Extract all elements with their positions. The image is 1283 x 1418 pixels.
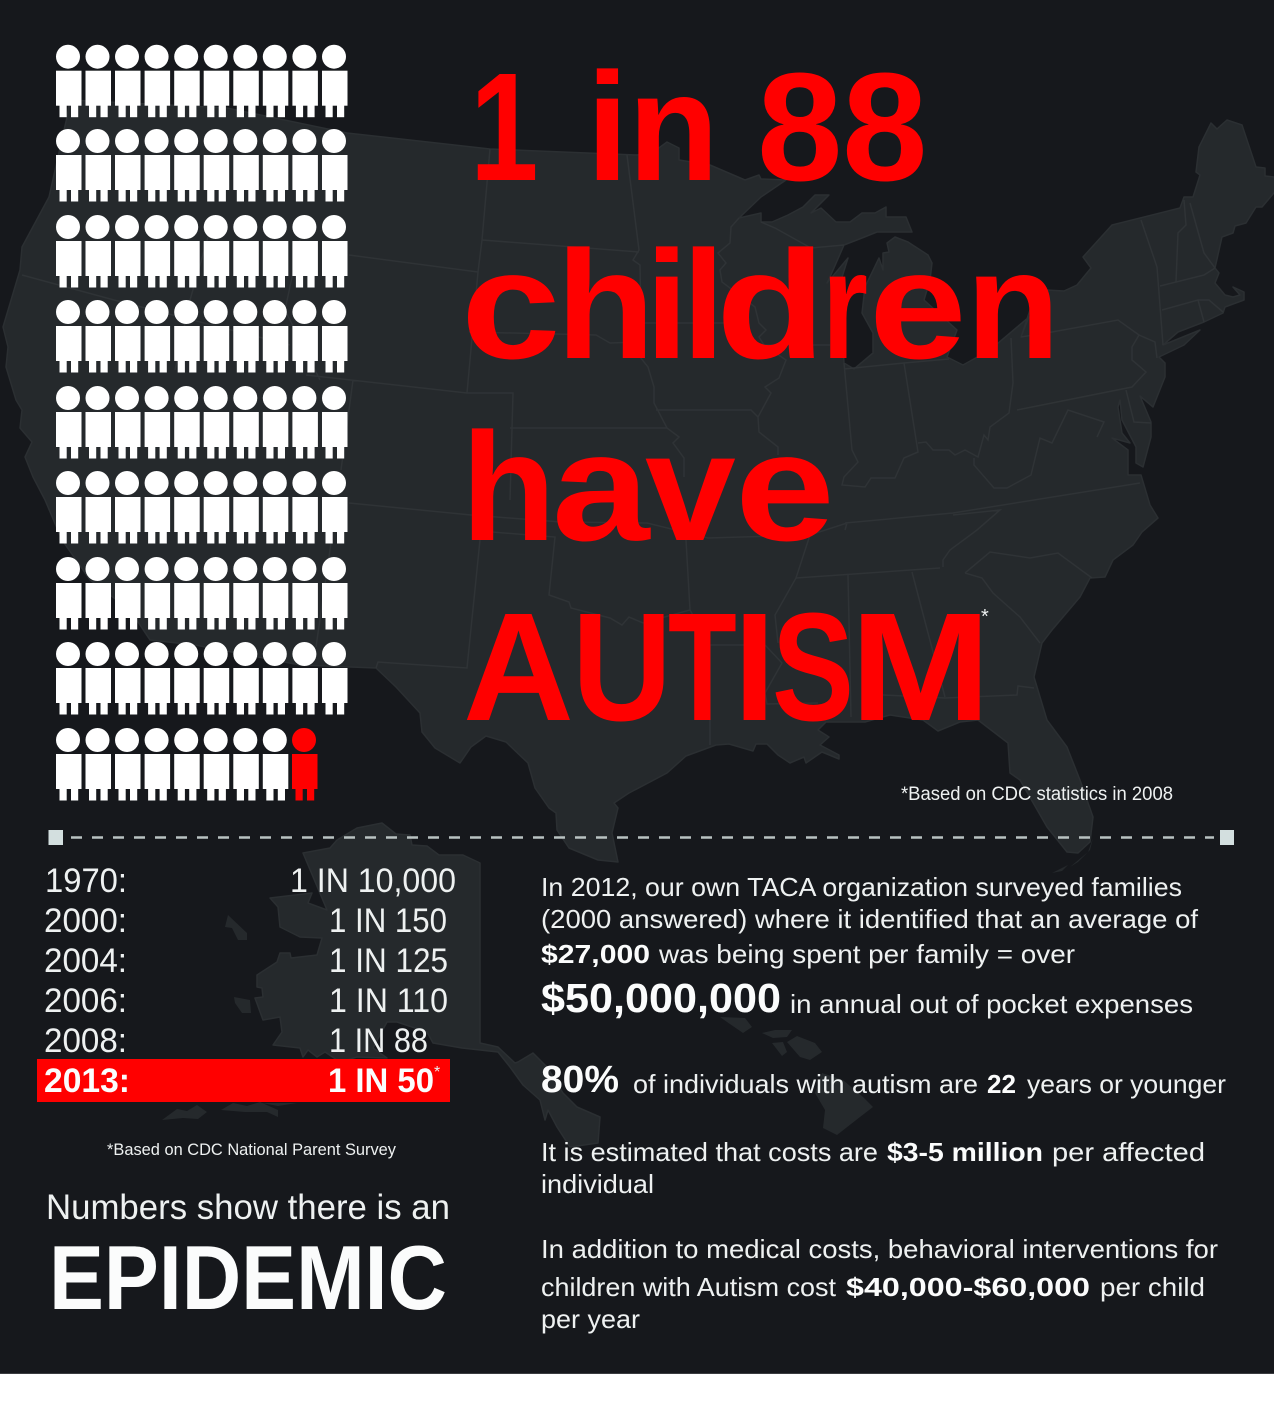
title: 1 in 88 children have AUTISM: I xyxy=(734,581,776,753)
row 4 of figures xyxy=(56,300,348,372)
title: 1 in 88 children have AUTISM: 8 xyxy=(842,41,928,213)
row 2 of figures xyxy=(56,129,348,202)
text block: TACA survey costs xyxy=(541,872,1199,1021)
text block: TACA survey costs: (2000 answered) where it identified that an average of xyxy=(541,904,1199,934)
title: 1 in 88 children have AUTISM: r xyxy=(822,219,868,391)
title: 1 in 88 children have AUTISM: l xyxy=(682,219,725,391)
title: 1 in 88 children have AUTISM: n xyxy=(966,219,1060,391)
text block: behavioral intervention costs: In addition to medical costs, behavioral interventions for xyxy=(541,1234,1218,1264)
title: 1 in 88 children have AUTISM: e xyxy=(735,401,835,573)
map: Hawaii xyxy=(720,1017,873,1135)
row: 2006: 2006: xyxy=(44,982,127,1020)
text block: TACA survey costs: In 2012, our own TACA organization surveyed families xyxy=(541,872,1182,902)
row: 2008: 2008: xyxy=(44,1022,127,1060)
row 7 of figures xyxy=(56,557,348,630)
title: 1 in 88 children have AUTISM: M xyxy=(850,581,991,753)
row: 1970 xyxy=(45,862,456,900)
row 9 of figures, eight white and one red xyxy=(56,728,318,800)
text block: behavioral intervention costs xyxy=(541,1234,1218,1334)
highlighted row: 2013 xyxy=(37,1059,450,1102)
row: 2008: 1 IN 88 xyxy=(329,1022,428,1060)
text block: TACA survey costs: in annual out of pocket expenses xyxy=(790,989,1193,1019)
text block: 80 percent statistic: 80% xyxy=(541,1059,619,1101)
footnote: National Parent Survey: *Based on CDC National Parent Survey xyxy=(107,1140,396,1159)
row: 1970: 1970: xyxy=(45,862,127,900)
highlighted row: 2013: 2013: xyxy=(44,1062,130,1100)
text block: lifetime cost per individual: It is estimated that costs are xyxy=(541,1137,878,1167)
title: 1 in 88 children have AUTISM: S xyxy=(772,581,854,753)
text block: 80 percent statistic xyxy=(541,1059,1226,1101)
callout: Numbers show there is an EPIDEMIC xyxy=(46,1188,450,1329)
pictogram: 1 in 88 figures, eight full rows and one row with a red figure xyxy=(56,45,348,800)
title: 1 in 88 children have AUTISM: h xyxy=(461,401,556,573)
text block: lifetime cost per individual xyxy=(541,1137,1205,1199)
title: 1 in 88 children have AUTISM: i xyxy=(586,41,629,213)
row: 2000 xyxy=(44,902,447,940)
row 3 of figures xyxy=(56,215,348,288)
text block: TACA survey costs: $50,000,000 xyxy=(541,975,781,1021)
title: 1 in 88 children have AUTISM: T xyxy=(668,581,737,753)
text block: TACA survey costs: was being spent per family = over xyxy=(658,939,1075,969)
title: 1 in 88 children have AUTISM: A xyxy=(463,581,574,753)
title: 1 in 88 children have AUTISM: d xyxy=(716,219,826,391)
dashed divider with square end caps xyxy=(48,830,1234,845)
background map: United States, Alaska and Hawaii xyxy=(3,100,1279,1147)
row: 2006: 1 IN 110 xyxy=(329,982,448,1020)
row: 2004: 1 IN 125 xyxy=(329,942,448,980)
map: Florida Keys xyxy=(1054,840,1092,872)
map: state borders xyxy=(22,149,1223,745)
title: 1 in 88 children have AUTISM: c xyxy=(461,219,561,391)
prevalence table by year xyxy=(37,862,456,1102)
text block: 80 percent statistic: years or younger xyxy=(1027,1069,1226,1099)
highlighted row: 2013: * xyxy=(434,1064,440,1081)
row 1 of figures xyxy=(56,45,348,117)
title: 1 in 88 children have AUTISM: * xyxy=(981,606,989,628)
map: Aleutian Islands and Bering Sea islands xyxy=(162,915,297,1120)
title: 1 in 88 children have AUTISM: 8 xyxy=(757,41,843,213)
title: 1 in 88 children have AUTISM: U xyxy=(572,581,672,753)
text block: lifetime cost per individual: $3-5 million xyxy=(887,1137,1043,1167)
text block: behavioral intervention costs: children with Autism cost xyxy=(541,1272,837,1302)
row: 1970: 1 IN 10,000 xyxy=(290,862,456,900)
title: 1 in 88 children have AUTISM xyxy=(461,41,1060,753)
row: 2000: 2000: xyxy=(44,902,127,940)
title: 1 in 88 children have AUTISM: h xyxy=(556,219,655,391)
title: 1 in 88 children have AUTISM: n xyxy=(628,41,719,213)
title: 1 in 88 children have AUTISM: i xyxy=(645,219,689,391)
map: contiguous United States xyxy=(3,100,1279,862)
title: 1 in 88 children have AUTISM: 1 xyxy=(470,41,538,213)
title: 1 in 88 children have AUTISM: a xyxy=(552,401,651,573)
row: 2008 xyxy=(44,1022,428,1060)
row 8 of figures xyxy=(56,642,348,714)
text block: lifetime cost per individual: individual xyxy=(541,1169,654,1199)
highlighted row: 2013: 1 IN 50 xyxy=(328,1062,434,1100)
text block: lifetime cost per individual: per affected xyxy=(1052,1137,1205,1167)
callout: Numbers show there is an EPIDEMIC: Numbers show there is an xyxy=(46,1188,450,1227)
row 6 of figures xyxy=(56,471,348,544)
text block: TACA survey costs: $27,000 xyxy=(541,939,650,969)
text block: 80 percent statistic: 22 xyxy=(987,1069,1016,1099)
title: 1 in 88 children have AUTISM: v xyxy=(645,401,736,573)
row: 2004: 2004: xyxy=(44,942,127,980)
row 5 of figures xyxy=(56,386,348,458)
map: Alaska xyxy=(255,823,600,1147)
text block: behavioral intervention costs: per child xyxy=(1100,1272,1205,1302)
text block: behavioral intervention costs: $40,000-$60,000 xyxy=(846,1272,1090,1302)
text block: behavioral intervention costs: per year xyxy=(541,1304,640,1334)
text block: 80 percent statistic: of individuals with autism are xyxy=(633,1069,978,1099)
callout: Numbers show there is an EPIDEMIC: EPIDEMIC xyxy=(49,1228,447,1329)
title: 1 in 88 children have AUTISM: e xyxy=(869,219,967,391)
row: 2004 xyxy=(44,942,448,980)
footnote: CDC statistics: *Based on CDC statistics in 2008 xyxy=(901,784,1173,805)
row: 2006 xyxy=(44,982,448,1020)
row: 2000: 1 IN 150 xyxy=(329,902,447,940)
